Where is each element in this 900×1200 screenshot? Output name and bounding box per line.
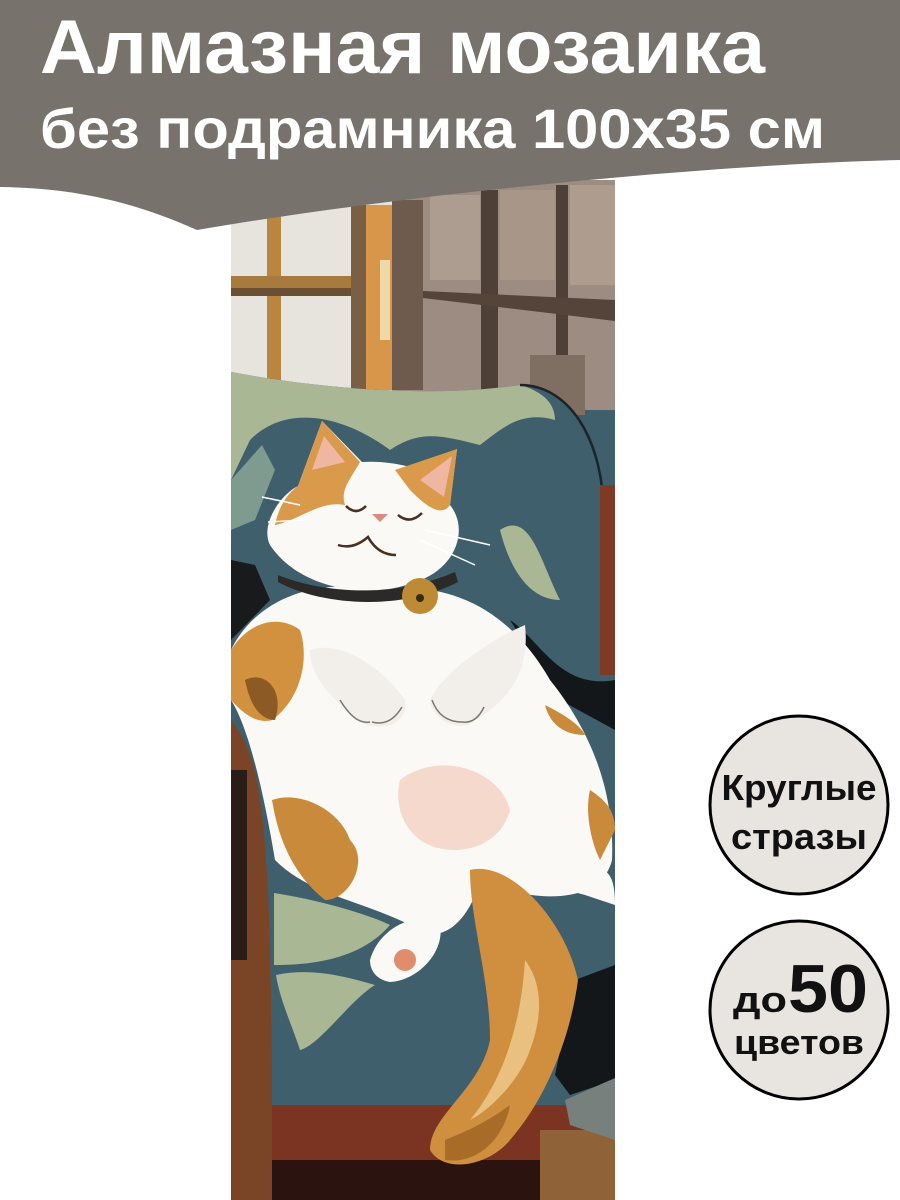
header banner xyxy=(0,0,900,230)
cat body xyxy=(231,586,615,982)
window: right city panes xyxy=(392,180,615,415)
window: left bright panes xyxy=(231,180,396,395)
cat head xyxy=(262,421,490,590)
badge: round rhinestones: стразы xyxy=(731,816,867,857)
armchair back xyxy=(231,372,615,730)
collar and bell xyxy=(278,572,458,614)
subtitle: без подрамника 100х35 см xyxy=(40,97,825,160)
badge: up to 50 colours: 50 xyxy=(788,951,868,1027)
badge: up to 50 colours xyxy=(710,921,888,1099)
badge: round rhinestones xyxy=(710,716,888,894)
badge: round rhinestones: Круглые xyxy=(722,767,876,808)
armchair arm and seat xyxy=(231,720,615,1200)
badge: up to 50 colours: цветов xyxy=(734,1024,864,1062)
title: Алмазная мозаика xyxy=(40,5,766,90)
cat tail xyxy=(430,869,578,1164)
painting: sleeping cat in armchair xyxy=(231,180,615,1200)
badge: up to 50 colours: до xyxy=(733,979,787,1020)
